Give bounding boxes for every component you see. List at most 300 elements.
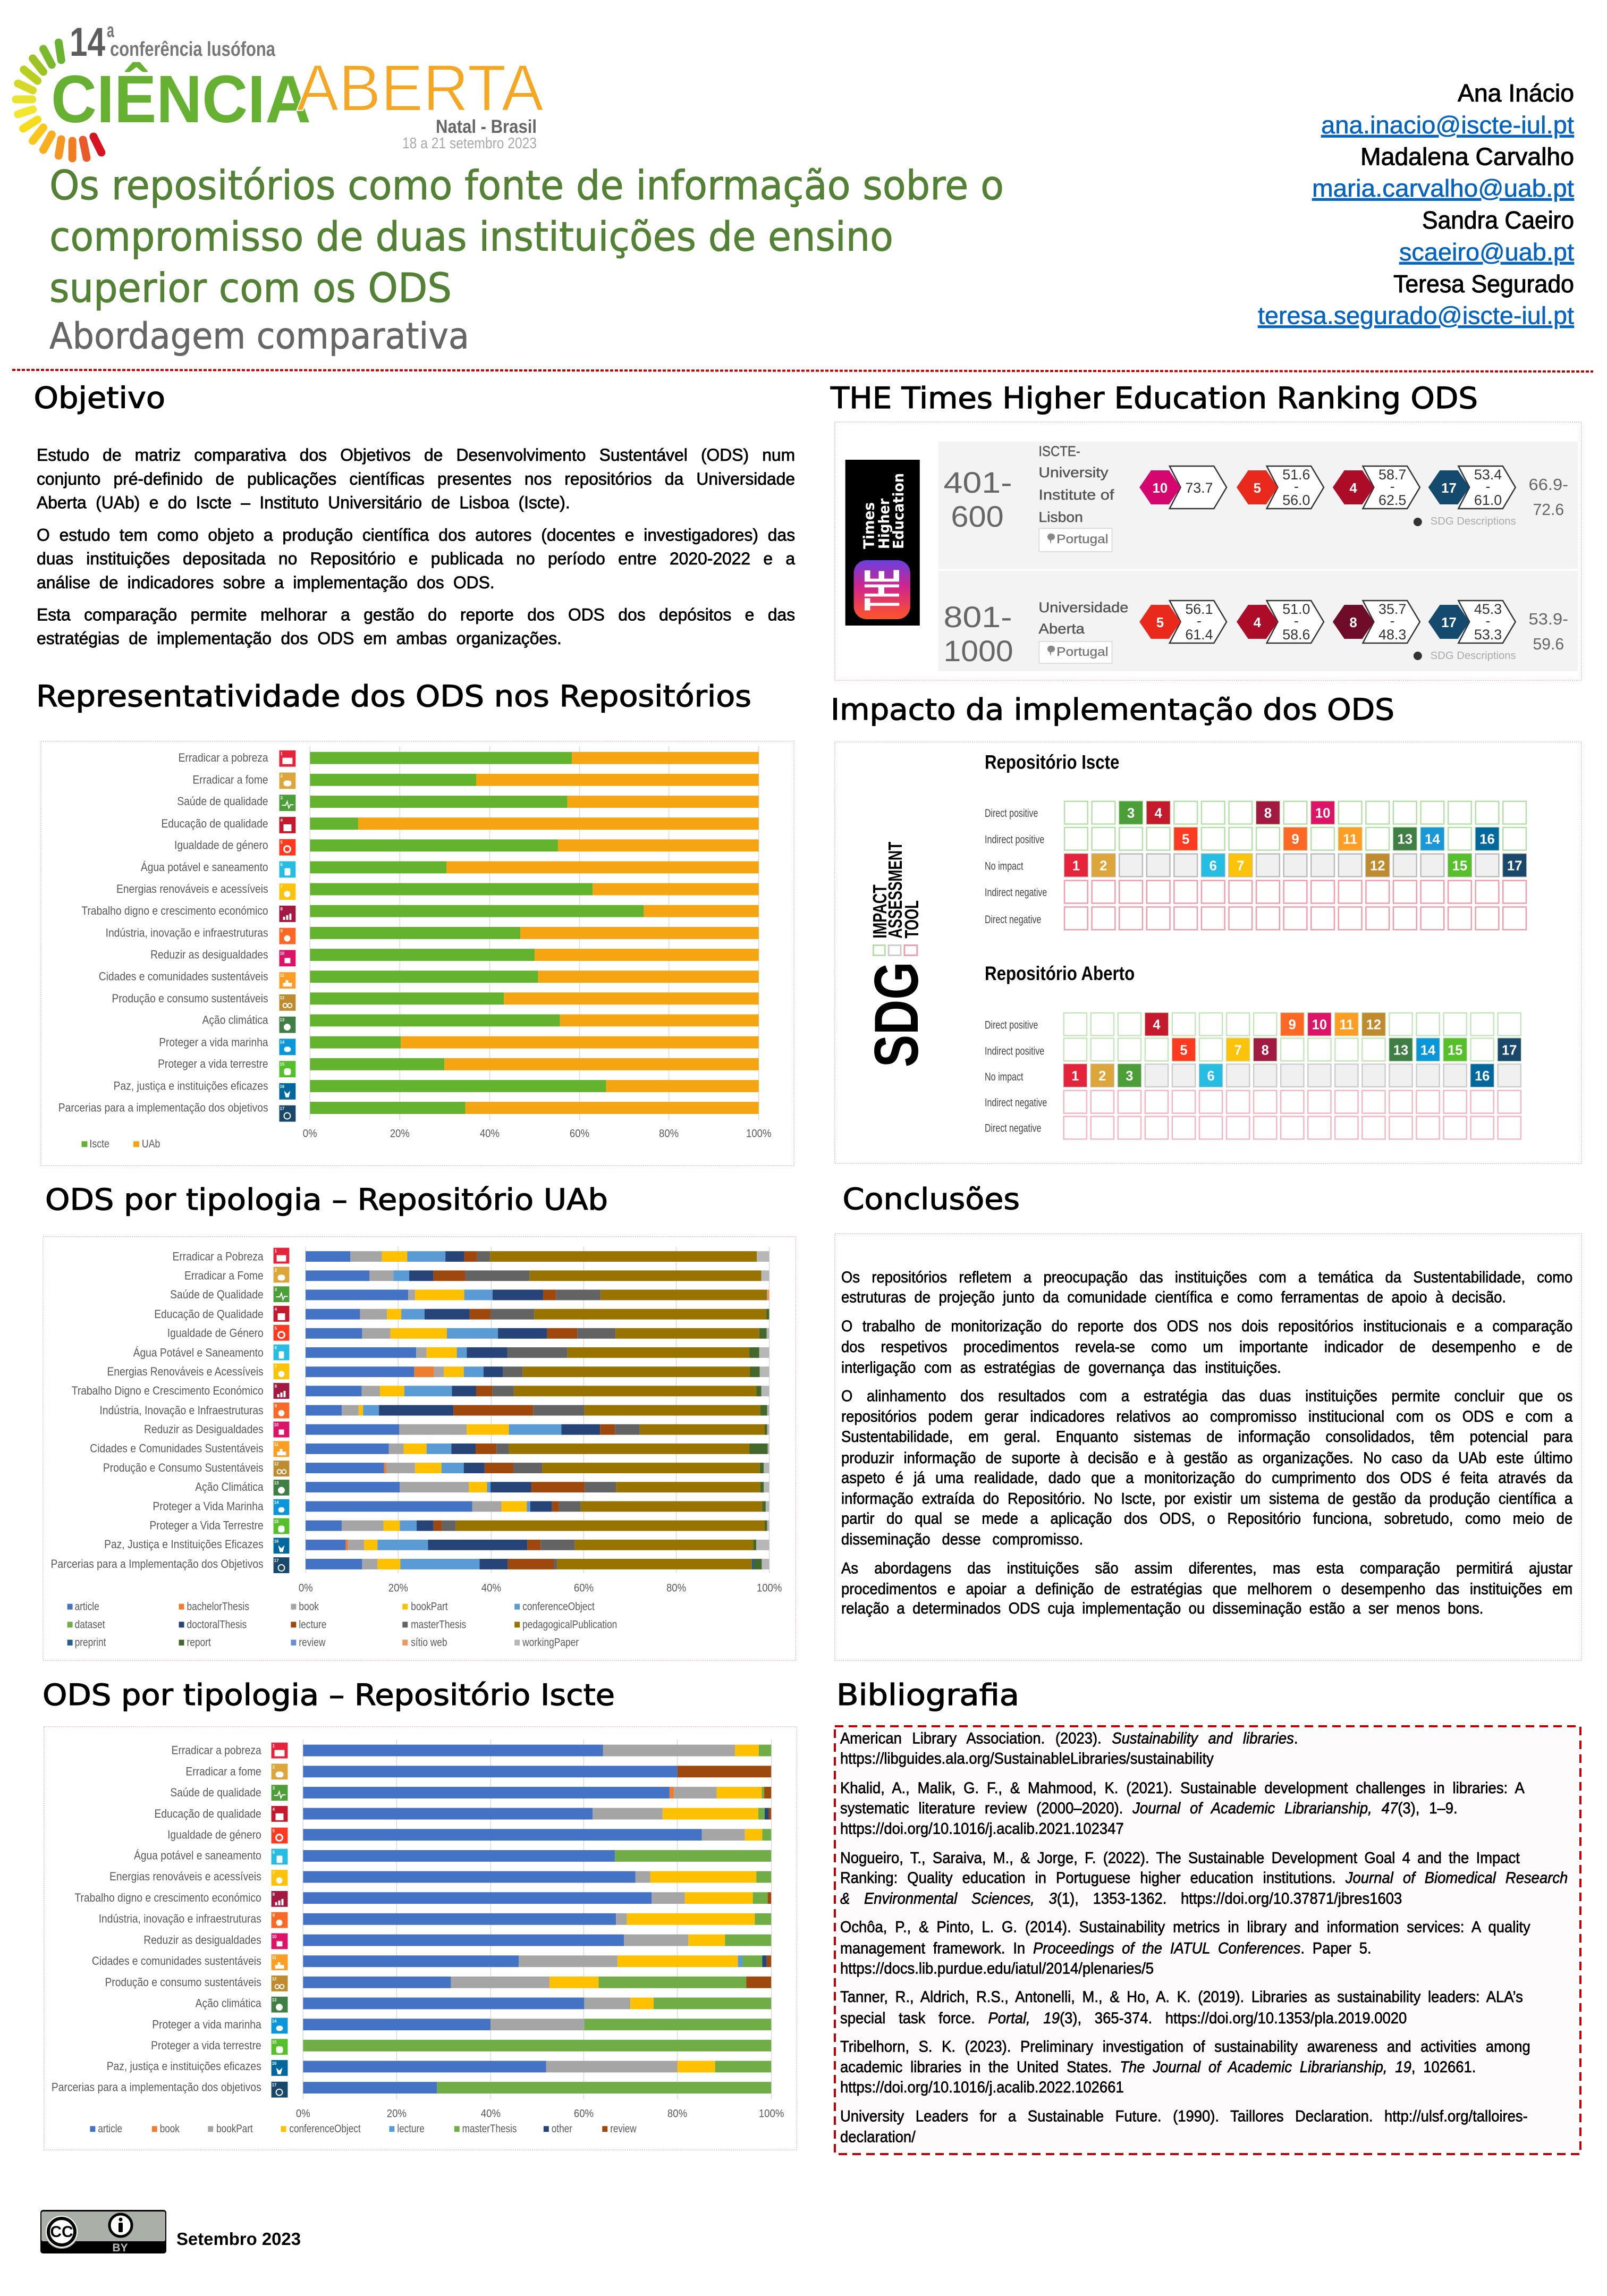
- panel: THE ranking: [835, 422, 1581, 680]
- x axis: 100%: [746, 1127, 771, 1140]
- legend: masterThesis: [462, 2123, 517, 2135]
- impact grid Aberto: 3: [1126, 1069, 1134, 1084]
- SDG icons: 16: [272, 2061, 277, 2066]
- x axis: 60%: [570, 1127, 589, 1140]
- impact grid Aberto: 17: [1502, 1043, 1517, 1058]
- legend: workingPaper: [522, 1637, 579, 1649]
- SDG icons: 7: [275, 1364, 277, 1369]
- text block: Objetivo: [36, 445, 795, 648]
- category labels: [51, 1250, 264, 1571]
- SDG icons: 13: [272, 1998, 277, 2003]
- ranking row: ISCTE: University: [1038, 465, 1109, 480]
- ranking row: ISCTE: ISCTE-: [1038, 443, 1080, 459]
- category labels: Energias renováveis e acessíveis: [116, 883, 268, 896]
- authors and e-mails: teresa.segurado@iscte-iul.pt: [1258, 302, 1574, 330]
- row labels Aberto: No impact: [985, 1071, 1024, 1083]
- date: Setembro 2023: [176, 2229, 301, 2249]
- authors and e-mails: Ana Inácio: [1458, 79, 1574, 107]
- text block: Objetivo: Aberta (UAb) e do Iscte – Instituto Universitário de Lisboa (Iscte).: [37, 493, 570, 512]
- x axis: 80%: [667, 2107, 687, 2120]
- text block: Conclusões: relação a determinados ODS cuja implementação ou disseminação estão a ser menos bons.: [841, 1600, 1483, 1617]
- impact grid Aberto: 12: [1366, 1017, 1381, 1033]
- impact grid Aberto: 2: [1098, 1069, 1106, 1084]
- ranking row: Universidade Aberta: -: [1294, 613, 1299, 629]
- SDG icons: 4: [273, 1807, 275, 1812]
- ranking row: ISCTE: [938, 442, 1578, 569]
- category labels: Paz, justiça e instituições eficazes: [107, 2060, 261, 2073]
- ranking row: Universidade Aberta: 61.4: [1185, 627, 1213, 643]
- row labels Iscte: Indirect positive: [985, 834, 1044, 846]
- stacked bars: [306, 1256, 769, 1564]
- SDG icons: 2: [275, 1268, 277, 1272]
- category labels: Erradicar a fome: [192, 773, 268, 787]
- impact grid Iscte: 4: [1154, 806, 1162, 821]
- legend: [67, 1601, 617, 1649]
- icon: SDG Impact Assessment Tool logo: SDG: [861, 961, 931, 1067]
- category labels: Erradicar a fome: [185, 1765, 261, 1778]
- icon: CC BY licence badge: [40, 2210, 166, 2254]
- category labels: Indústria, inovação e infraestruturas: [106, 927, 268, 940]
- category labels: Água potável e saneamento: [134, 1849, 261, 1862]
- ranking row: Universidade Aberta: 5: [1156, 615, 1164, 630]
- legend: review: [610, 2123, 637, 2135]
- SDG icons: 1: [275, 1249, 277, 1254]
- impact grid Iscte: 3: [1127, 806, 1135, 821]
- impact grid Iscte: 8: [1264, 806, 1272, 821]
- authors and e-mails: scaeiro@uab.pt: [1399, 238, 1574, 266]
- text block: Bibliografia: special task force. Portal, 19(3), 365-374. https://doi.org/10.1353/pla.2019.0020: [840, 2010, 1407, 2027]
- legend: lecture: [299, 1619, 326, 1631]
- impact grid Iscte: 17: [1507, 858, 1522, 873]
- SDG icons: 4: [281, 818, 283, 823]
- stacked bars: [303, 1751, 771, 2088]
- SDG icons: 10: [274, 1423, 279, 1428]
- category labels: Educação de qualidade: [154, 1808, 261, 1820]
- x axis: 20%: [390, 1127, 410, 1140]
- ranking row: Universidade Aberta: SDG Descriptions: [1431, 650, 1516, 662]
- ranking row: ISCTE: 73.7: [1185, 480, 1213, 496]
- heading: ODS por tipologia UAb: ODS por tipologia – Repositório UAb: [45, 1183, 608, 1217]
- category labels: Parcerias para a Implementação dos Objetivos: [51, 1558, 264, 1571]
- icon: CC BY licence badge: BY: [112, 2242, 128, 2254]
- logo: Ciência Aberta conference: Natal - Brasil: [436, 116, 537, 137]
- ranking row: ISCTE: 401-: [944, 466, 1012, 499]
- impact grid Aberto: 8: [1262, 1043, 1269, 1058]
- impact grid Aberto: 5: [1180, 1043, 1188, 1058]
- icon: SDG Impact Assessment Tool logo: IMPACT: [869, 884, 891, 939]
- ranking row: ISCTE: 600: [951, 500, 1004, 533]
- impact grid Aberto: 14: [1420, 1043, 1436, 1058]
- SDG icons: 5: [281, 840, 283, 845]
- legend: Iscte: [89, 1138, 109, 1151]
- SDG icons: 5: [273, 1829, 275, 1834]
- legend: lecture: [397, 2123, 425, 2135]
- text block: Bibliografia: systematic literature review (2000–2020). Journal of Academic Librarianship, 47(3), 1–9.: [840, 1800, 1457, 1817]
- legend: bachelorThesis: [187, 1601, 249, 1613]
- ranking row: ISCTE: 51.6: [1282, 467, 1310, 483]
- category labels: Igualdade de género: [167, 1828, 261, 1842]
- row labels Aberto: [985, 1019, 1047, 1134]
- SDG icons: 3: [275, 1287, 277, 1292]
- panel: Conclusões frame: [835, 1234, 1581, 1660]
- heading: THE ranking: THE Times Higher Education Ranking ODS: [830, 381, 1478, 415]
- SDG icons: 9: [281, 929, 283, 934]
- text block: Conclusões: O trabalho de monitorização do reporte dos ODS nos dois repositórios institucionais e a comparação: [841, 1318, 1572, 1335]
- text block: Conclusões: O alinhamento dos resultados com a estratégia das duas instituições permite concluir que os: [841, 1388, 1572, 1405]
- legend: report: [187, 1637, 211, 1649]
- category labels: Indústria, inovação e infraestruturas: [99, 1913, 261, 1926]
- category labels: Paz, Justiça e Instituições Eficazes: [104, 1538, 264, 1551]
- logo: Ciência Aberta conference: CIÊNCIA: [51, 62, 311, 137]
- impact grid Aberto: 1: [1071, 1069, 1079, 1084]
- category labels: Produção e consumo sustentáveis: [105, 1976, 261, 1989]
- logo: Ciência Aberta conference: ª: [107, 20, 114, 55]
- legend: UAb: [142, 1138, 160, 1151]
- legend: article: [98, 2123, 122, 2135]
- ranking row: Universidade Aberta: 59.6: [1533, 635, 1564, 653]
- heading: Conclusões: Conclusões: [843, 1182, 1020, 1216]
- impact grid Aberto: [1064, 1013, 1521, 1139]
- SDG icons: 2: [273, 1765, 275, 1769]
- subtitle: Abordagem comparativa: [49, 316, 469, 357]
- legend: conferenceObject: [522, 1601, 595, 1613]
- SDG icons: 12: [274, 1462, 279, 1466]
- impact grid Iscte: 10: [1315, 806, 1330, 821]
- text block: Conclusões: disseminação desse compromisso.: [841, 1531, 1083, 1548]
- SDG icons: 16: [274, 1539, 279, 1543]
- logo: Ciência Aberta conference: [16, 20, 544, 158]
- legend: pedagogicalPublication: [522, 1619, 617, 1631]
- ranking row: Universidade Aberta: 17: [1441, 615, 1457, 630]
- text block: Bibliografia: declaration/: [840, 2129, 915, 2146]
- category labels: Saúde de Qualidade: [170, 1288, 264, 1301]
- ranking row: ISCTE: Portugal: [1056, 532, 1109, 546]
- row labels Aberto: Indirect negative: [985, 1097, 1047, 1109]
- ranking row: Universidade Aberta: 45.3: [1474, 601, 1502, 617]
- legend: article: [75, 1601, 99, 1613]
- category labels: Proteger a vida marinha: [159, 1036, 268, 1049]
- legend: conferenceObject: [289, 2123, 361, 2135]
- SDG icons: 2: [281, 773, 283, 778]
- impact grid Iscte: 5: [1182, 832, 1189, 847]
- x axis: [299, 1582, 782, 1594]
- row labels Iscte: Direct negative: [985, 914, 1041, 926]
- category labels: Cidades e comunidades sustentáveis: [99, 970, 268, 983]
- category labels: Produção e Consumo Sustentáveis: [103, 1462, 264, 1474]
- category labels: Proteger a vida marinha: [152, 2018, 261, 2031]
- text block: Bibliografia: https://doi.org/10.1016/j.acalib.2021.102347: [840, 1820, 1123, 1838]
- ranking row: ISCTE: 17: [1441, 481, 1457, 496]
- SDG icons: 8: [275, 1384, 277, 1389]
- text block: Bibliografia: Nogueiro, T., Saraiva, M., & Jorge, F. (2022). The Sustainable Development Goal 4 and the Impact: [840, 1850, 1520, 1867]
- category labels: Trabalho digno e crescimento económico: [74, 1892, 261, 1904]
- logo: Ciência Aberta conference: 18 a 21 setembro 2023: [402, 135, 537, 152]
- SDG icons: 3: [273, 1786, 275, 1791]
- title: Os repositórios como fonte de informação sobre o: [49, 162, 1004, 209]
- legend: [90, 2123, 637, 2135]
- text block: Bibliografia: & Environmental Sciences, 3(1), 1353-1362. https://doi.org/10.37871/jbres1603: [840, 1890, 1402, 1907]
- ranking row: Universidade Aberta: 53.9-: [1529, 610, 1568, 628]
- icon: CC BY licence badge: CC: [50, 2223, 73, 2241]
- category labels: Proteger a vida terrestre: [158, 1058, 268, 1070]
- logo: Ciência Aberta conference: ABERTA: [297, 52, 544, 125]
- text block: Conclusões: Os repositórios refletem a preocupação das instituições com a temática da Sustentabilidade, como: [841, 1269, 1572, 1286]
- category labels: Trabalho Digno e Crescimento Económico: [72, 1385, 264, 1397]
- category labels: Igualdade de Género: [167, 1327, 264, 1340]
- SDG icons: [280, 750, 295, 1122]
- SDG icons: 11: [272, 1955, 277, 1960]
- authors and e-mails: maria.carvalho@uab.pt: [1312, 174, 1574, 202]
- row labels Aberto: Direct positive: [985, 1019, 1038, 1032]
- impact grid Iscte: 1: [1072, 858, 1080, 873]
- x axis: 0%: [299, 1582, 313, 1594]
- x axis: [296, 2107, 784, 2120]
- SDG icons: [274, 1248, 289, 1573]
- legend: book: [299, 1601, 319, 1613]
- ranking row: Universidade Aberta: 51.0: [1282, 601, 1310, 617]
- row labels Aberto: Direct negative: [985, 1122, 1041, 1134]
- impact grid Iscte: 2: [1099, 858, 1107, 873]
- category labels: Erradicar a pobreza: [172, 1744, 261, 1757]
- impact grid Aberto: 7: [1234, 1043, 1242, 1058]
- legend: doctoralThesis: [187, 1619, 247, 1631]
- SDG icons: 15: [280, 1062, 285, 1067]
- SDG icons: 1: [281, 752, 283, 756]
- impact grid Aberto: 16: [1475, 1069, 1490, 1084]
- heading: Repositório Aberto: Repositório Aberto: [985, 963, 1135, 984]
- ranking row: Universidade Aberta: 801-: [944, 600, 1012, 634]
- x axis: 20%: [387, 2107, 407, 2120]
- text block: Conclusões: repositórios podem gerar indicadores relativos ao compromisso institucional com os ODS e com a: [841, 1408, 1572, 1425]
- text block: Conclusões: dos respetivos procedimentos revela-se como um importante indicador de desempenho e de: [841, 1338, 1572, 1356]
- ranking row: ISCTE: 10: [1153, 481, 1168, 496]
- SDG icons: 9: [273, 1913, 275, 1918]
- SDG icons: 14: [280, 1040, 285, 1044]
- SDG icons: 1: [273, 1744, 275, 1749]
- heading: Objetivo: Objetivo: [34, 381, 165, 415]
- SDG icons: 6: [275, 1346, 277, 1350]
- ranking row: ISCTE: 4: [1349, 481, 1357, 496]
- legend: [82, 1138, 160, 1151]
- text block: Conclusões: interligação com as estratégias de governança das instituições.: [841, 1359, 1281, 1377]
- category labels: Ação climática: [202, 1014, 268, 1027]
- text block: Bibliografia: Tribelhorn, S. K. (2023). Preliminary investigation of sustainability awareness and activities among: [840, 2038, 1530, 2055]
- legend: other: [552, 2123, 572, 2135]
- category labels: Educação de qualidade: [161, 817, 268, 830]
- ranking row: Universidade Aberta: 1000: [944, 634, 1013, 668]
- x axis: 80%: [659, 1127, 679, 1140]
- ranking row: ISCTE: -: [1294, 478, 1299, 494]
- icon: Times Higher Education logo: Education: [890, 473, 907, 549]
- x axis: 100%: [759, 2107, 784, 2120]
- impact grid Aberto: 15: [1448, 1043, 1462, 1058]
- legend: review: [299, 1637, 326, 1649]
- ranking row: ISCTE: -: [1486, 478, 1490, 494]
- ranking row: Universidade Aberta: Aberta: [1038, 621, 1085, 637]
- impact grid Iscte: 9: [1291, 832, 1299, 847]
- SDG icons: 9: [275, 1404, 277, 1408]
- impact grid Iscte: [1064, 801, 1526, 930]
- SDG icons: 16: [280, 1084, 285, 1089]
- ranking row: ISCTE: 53.4: [1474, 467, 1502, 483]
- category labels: Saúde de qualidade: [170, 1786, 261, 1799]
- text block: Objetivo: Estudo de matriz comparativa dos Objetivos de Desenvolvimento Sustentável (ODS) num: [37, 445, 795, 465]
- icon: SDG Impact Assessment Tool logo: [861, 842, 931, 1067]
- SDG icons: 6: [273, 1850, 275, 1854]
- impact grid Aberto: 13: [1393, 1043, 1408, 1058]
- impact grid Iscte: 16: [1479, 832, 1495, 847]
- text block: Conclusões: As abordagens das instituições são assim diferentes, mas esta comparação permitirá ajustar: [841, 1560, 1572, 1577]
- x axis: 0%: [303, 1127, 317, 1140]
- category labels: Cidades e Comunidades Sustentáveis: [90, 1442, 264, 1455]
- heading: Representatividade: Representatividade dos ODS nos Repositórios: [36, 679, 751, 713]
- SDG icons: 3: [281, 796, 283, 800]
- row labels Iscte: [985, 807, 1047, 926]
- ranking row: ISCTE: SDG Descriptions: [1431, 516, 1516, 527]
- x axis: 100%: [757, 1582, 782, 1594]
- panel: Bibliografia frame: [835, 1726, 1580, 2154]
- heading: ODS por tipologia Iscte: ODS por tipologia – Repositório Iscte: [43, 1678, 615, 1712]
- text block: Conclusões: procedimentos e apoiar a definição de estratégias que melhorem o desempenho das instituições em: [841, 1580, 1572, 1598]
- category labels: Erradicar a Fome: [184, 1269, 264, 1282]
- title: superior com os ODS: [49, 264, 452, 311]
- ranking row: ISCTE: 72.6: [1533, 500, 1564, 519]
- SDG icons: 11: [280, 973, 284, 978]
- SDG icons: 4: [275, 1307, 277, 1312]
- x axis: 80%: [666, 1582, 686, 1594]
- panel: representatividade chart: [41, 741, 794, 1166]
- legend: bookPart: [216, 2123, 253, 2135]
- row labels Iscte: Indirect negative: [985, 887, 1047, 899]
- SDG icons: 13: [280, 1018, 285, 1023]
- x axis: 40%: [481, 1582, 501, 1594]
- logo: Ciência Aberta conference: conferência lusófona: [110, 38, 276, 61]
- category labels: Indústria, Inovação e Infraestruturas: [100, 1404, 264, 1417]
- panel: impact assessment: [835, 742, 1581, 1163]
- category labels: Erradicar a pobreza: [179, 752, 268, 764]
- row labels Iscte: Direct positive: [985, 807, 1038, 820]
- panel: ODS por tipologia Iscte chart: [44, 1727, 797, 2150]
- ranking row: ISCTE: -: [1390, 478, 1395, 494]
- category labels: Reduzir as Desigualdades: [144, 1423, 264, 1436]
- legend: sítio web: [411, 1637, 447, 1649]
- category labels: Proteger a vida terrestre: [151, 2039, 261, 2052]
- text block: Bibliografia: Ranking: Quality education in Portuguese higher education institutions. Journal of Biomedical Research: [840, 1869, 1568, 1887]
- category labels: Parcerias para a implementação dos objetivos: [58, 1102, 268, 1115]
- icon: Times Higher Education logo: THE: [854, 569, 910, 611]
- SDG icons: 17: [272, 2083, 277, 2088]
- authors and e-mails: ana.inacio@iscte-iul.pt: [1321, 111, 1574, 139]
- ranking row: ISCTE: 58.7: [1378, 467, 1406, 483]
- SDG icons: 15: [274, 1520, 279, 1524]
- row labels Aberto: Indirect positive: [985, 1045, 1044, 1057]
- category labels: Cidades e comunidades sustentáveis: [92, 1955, 261, 1968]
- text block: Bibliografia: [840, 1730, 1568, 2146]
- row labels Iscte: No impact: [985, 860, 1024, 872]
- impact grid Iscte: 11: [1343, 832, 1357, 847]
- text block: Conclusões: produzir informação de suporte à decisão e à gestão as organizações. No caso da UAb este último: [841, 1449, 1572, 1467]
- impact grid Iscte: 12: [1370, 858, 1385, 873]
- SDG icons: 13: [274, 1481, 279, 1485]
- ranking row: Universidade Aberta: -: [1197, 613, 1202, 629]
- ranking row: Universidade Aberta: 4: [1254, 615, 1262, 630]
- SDG icons: 17: [274, 1558, 279, 1563]
- ranking row: Universidade Aberta: Universidade: [1038, 600, 1128, 615]
- text block: Bibliografia: American Library Association. (2023). Sustainability and libraries.: [840, 1730, 1298, 1748]
- SDG icons: 7: [281, 884, 283, 889]
- ranking row: ISCTE: 56.0: [1282, 492, 1310, 508]
- legend: bookPart: [411, 1601, 448, 1613]
- ranking row: Universidade Aberta: -: [1486, 613, 1490, 629]
- category labels: Água Potável e Saneamento: [133, 1346, 264, 1360]
- ranking row: ISCTE: Lisbon: [1038, 509, 1083, 525]
- authors and e-mails: Teresa Segurado: [1393, 270, 1574, 298]
- category labels: Educação de Qualidade: [154, 1308, 264, 1321]
- heading: Impacto: Impacto da implementação dos ODS: [831, 693, 1394, 727]
- text block: Bibliografia: https://doi.org/10.1016/j.acalib.2022.102661: [840, 2079, 1123, 2096]
- ranking row: Universidade Aberta: -: [1390, 613, 1395, 629]
- text block: Bibliografia: management framework. In Proceedings of the IATUL Conferences. Paper 5.: [840, 1940, 1371, 1957]
- text block: Conclusões: aspeto é já uma realidade, dado que a monitorização do cumprimento dos ODS é feita através da: [841, 1470, 1572, 1487]
- text block: Bibliografia: Khalid, A., Malik, G. F., & Mahmood, K. (2021). Sustainable development challenges in libraries: A: [840, 1779, 1525, 1797]
- SDG icons: 11: [274, 1442, 279, 1447]
- icon: sun arc of rays: [16, 43, 102, 158]
- ranking row: Universidade Aberta: 58.6: [1282, 627, 1310, 643]
- category labels: Energias Renováveis e Acessíveis: [107, 1365, 264, 1379]
- text block: Objetivo: O estudo tem como objeto a produção científica dos autores (docentes e investigadores) das: [37, 525, 795, 544]
- impact grid Iscte: 15: [1452, 858, 1467, 873]
- SDG icons: 14: [274, 1500, 279, 1505]
- legend: dataset: [75, 1619, 105, 1631]
- icon: Times Higher Education logo: Higher: [875, 499, 893, 549]
- text block: Conclusões: partir do qual se mede a aplicação dos ODS, o Repositório funciona, sobretudo, como meio de: [841, 1510, 1572, 1527]
- impact grid Iscte: 7: [1237, 858, 1245, 873]
- x axis: 0%: [296, 2107, 310, 2120]
- impact grid Aberto: 10: [1312, 1017, 1327, 1033]
- ranking row: ISCTE: Institute of: [1038, 487, 1114, 503]
- x axis: [303, 1127, 771, 1140]
- authors and e-mails: Madalena Carvalho: [1360, 142, 1574, 170]
- icon: Times Higher Education logo: Times: [860, 502, 877, 549]
- authors and e-mails: Sandra Caeiro: [1422, 206, 1574, 234]
- icon: SDG Impact Assessment Tool logo: ASSESSMENT: [885, 842, 906, 939]
- heading: Bibliografia: Bibliografia: [836, 1678, 1019, 1712]
- category labels: [52, 1744, 261, 2094]
- ranking row: Universidade Aberta: 8: [1349, 615, 1357, 630]
- ranking row: Universidade Aberta: Portugal: [1056, 645, 1109, 659]
- legend: preprint: [75, 1637, 106, 1649]
- SDG icons: 8: [281, 907, 283, 911]
- impact grid Aberto: 11: [1339, 1017, 1354, 1033]
- text block: Objetivo: conjunto pré-definido de publicações científicas presentes nos repositórios da Universidade: [37, 469, 795, 488]
- category labels: Trabalho digno e crescimento económico: [81, 905, 268, 917]
- SDG icons: 12: [280, 995, 285, 1000]
- category labels: Proteger a Vida Marinha: [153, 1500, 264, 1513]
- text block: Bibliografia: https://docs.lib.purdue.edu/iatul/2014/plenaries/5: [840, 1960, 1154, 1977]
- text block: Objetivo: duas instituições depositada no Repositório e publicada no período entre 2020-2022 e a: [37, 548, 795, 568]
- text block: Bibliografia: https://libguides.ala.org/SustainableLibraries/sustainability: [840, 1750, 1214, 1767]
- text block: Bibliografia: Ochôa, P., & Pinto, L. G. (2014). Sustainability metrics in library and information services: A quality: [840, 1919, 1530, 1936]
- SDG icons: 7: [273, 1871, 275, 1876]
- panel: ODS por tipologia UAb chart: [43, 1237, 796, 1660]
- ranking row: ISCTE: 5: [1254, 481, 1261, 496]
- legend: book: [160, 2123, 180, 2135]
- x axis: 40%: [480, 1127, 500, 1140]
- text block: Bibliografia: University Leaders for a Sustainable Future. (1990). Taillores Declaration. http://ulsf.org/talloires-: [840, 2108, 1527, 2125]
- SDG icons: 5: [275, 1326, 277, 1331]
- category labels: Erradicar a Pobreza: [172, 1250, 264, 1263]
- text block: Objetivo: estratégias de implementação dos ODS em ambas organizações.: [37, 628, 562, 648]
